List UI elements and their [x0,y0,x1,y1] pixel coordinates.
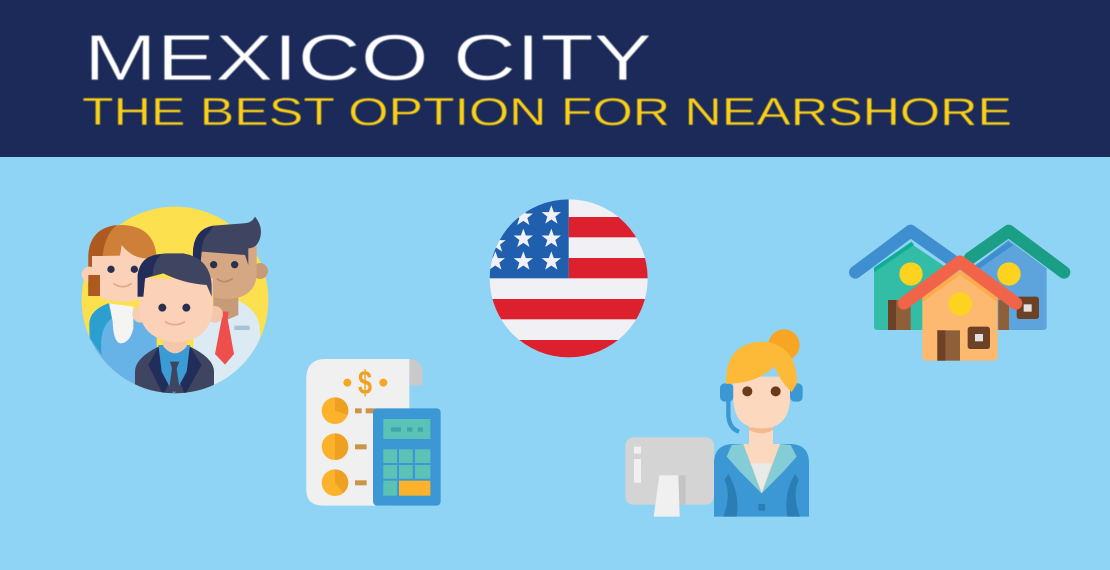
agent [714,329,809,517]
right man [193,217,268,365]
face [733,377,790,428]
hair bun [768,329,800,361]
right man body [193,300,260,392]
icon: call center agent [625,329,809,517]
header banner [0,0,1110,157]
left woman [82,225,157,302]
icon: US flag [486,197,650,360]
dollar sign: $ [358,365,372,402]
icon: houses [855,231,1064,361]
blue canton with stars [486,197,569,278]
neck [749,423,773,445]
torso [714,444,809,517]
calculator [373,408,441,506]
front orange house [904,262,1016,361]
left woman body [89,303,157,392]
yellow backdrop circle [82,207,268,393]
icon: three business people [82,207,268,408]
pie bullets [322,397,348,424]
invoice sheet [306,359,409,506]
front man suit [135,346,214,394]
paper curl [408,359,423,385]
right blue house [970,231,1064,330]
red stripes [487,217,650,360]
left green house [855,231,952,330]
icon: invoice and calculator [306,359,441,506]
dashes [355,408,376,485]
title: MEXICO CITY [84,21,652,94]
subtitle: THE BEST OPTION FOR NEARSHORE [82,91,1012,134]
front man head [132,253,223,353]
headset [720,383,733,402]
hair [726,342,797,392]
monitor [625,437,714,517]
